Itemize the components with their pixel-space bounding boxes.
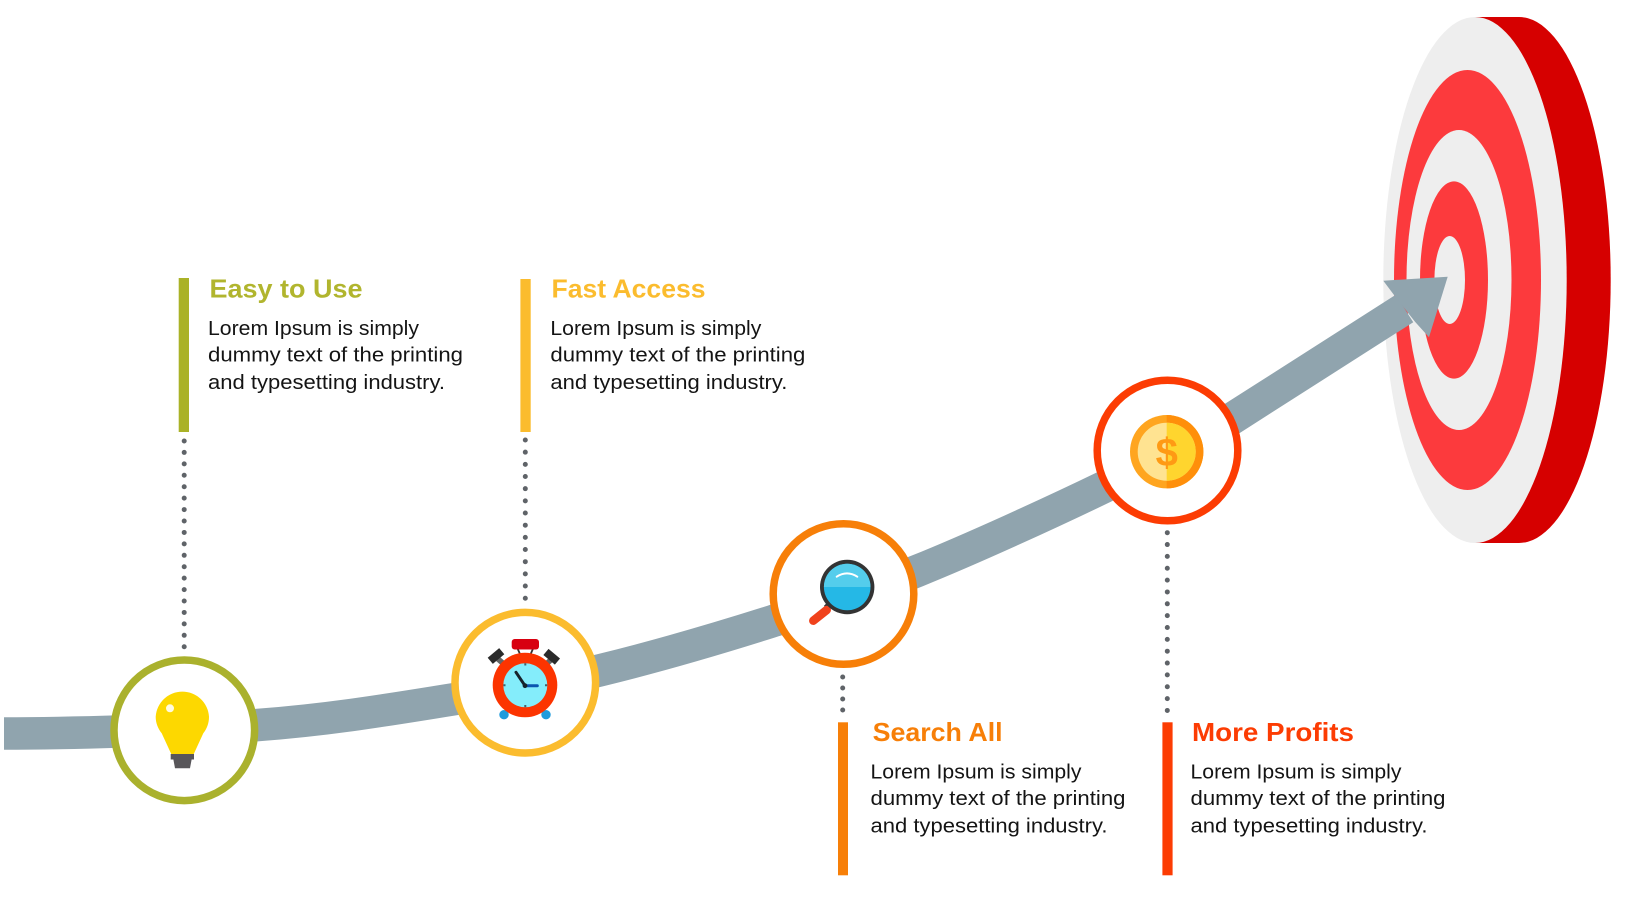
text block: Search All <box>838 717 1126 875</box>
text block: Easy to Use: Lorem Ipsum is simply <box>208 317 420 340</box>
dotted connector 4 <box>1165 533 1170 712</box>
text block: Search All: dummy text of the printing <box>870 787 1126 810</box>
step 4 node: coin <box>1097 380 1238 521</box>
step 3 node: magnifier <box>773 524 914 664</box>
text block: Search All: Search All <box>873 717 1003 747</box>
text block: More Profits: More Profits <box>1192 717 1354 747</box>
growth arrow <box>4 277 1448 734</box>
text block: Fast Access: and typesetting industry. <box>550 371 787 394</box>
dotted connector 2 <box>523 440 528 599</box>
step 2 node: alarm clock <box>455 612 596 753</box>
text block: Easy to Use: Easy to Use <box>210 274 362 304</box>
text block: Fast Access: Fast Access <box>552 274 706 304</box>
text block: Search All: and typesetting industry. <box>870 814 1108 837</box>
icon: dollar coin: $ <box>1156 431 1178 475</box>
step 1 node: light bulb <box>114 660 255 801</box>
icon: light bulb <box>156 692 209 768</box>
icon: dollar coin <box>1130 415 1203 488</box>
text block: Easy to Use: and typesetting industry. <box>208 371 445 394</box>
target board <box>1383 17 1611 543</box>
text block: Search All: Lorem Ipsum is simply <box>870 760 1082 783</box>
text block: More Profits: and typesetting industry. <box>1190 814 1428 837</box>
text block: Fast Access <box>520 274 805 432</box>
text block: Easy to Use: dummy text of the printing <box>208 344 463 367</box>
text block: More Profits: Lorem Ipsum is simply <box>1190 760 1402 783</box>
icon: alarm clock <box>488 639 560 719</box>
text block: Easy to Use <box>179 274 463 432</box>
text block: Fast Access: dummy text of the printing <box>550 344 805 367</box>
text block: Fast Access: Lorem Ipsum is simply <box>550 317 762 340</box>
icon: magnifying glass <box>813 560 874 621</box>
text block: More Profits: dummy text of the printing <box>1190 787 1446 810</box>
dotted connector 1 <box>182 441 187 648</box>
text block: More Profits <box>1162 717 1446 875</box>
dotted connector 3 <box>840 677 845 711</box>
